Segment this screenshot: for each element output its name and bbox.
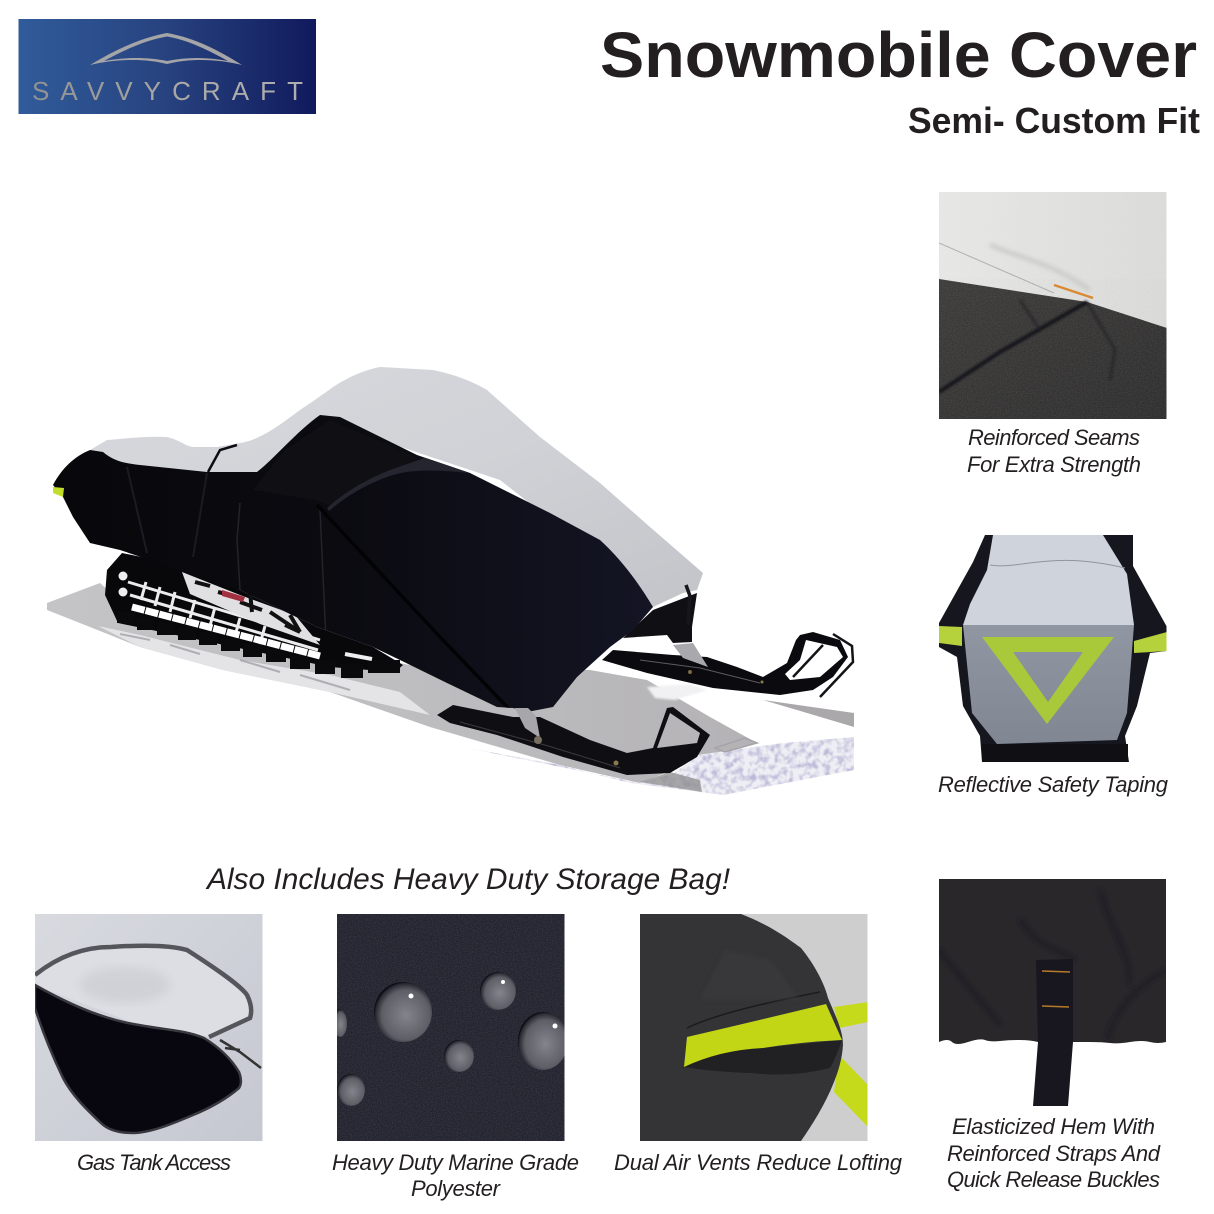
cover strap <box>208 445 237 472</box>
ground surface <box>47 583 854 795</box>
panel: marine grade polyester <box>332 914 579 1201</box>
water droplets <box>374 982 432 1042</box>
far ski <box>602 632 853 697</box>
caption: elasticized hem: Reinforced Straps And <box>947 1141 1161 1166</box>
suspension rails <box>128 582 320 650</box>
caption: reinforced seams: For Extra Strength <box>967 452 1141 477</box>
caption: reinforced seams: Reinforced Seams <box>968 425 1140 450</box>
track and suspension <box>105 553 403 678</box>
logo wordmark: SAVVYCRAFT <box>32 76 303 106</box>
storage bag heading: Also Includes Heavy Duty Storage Bag! <box>205 863 731 896</box>
caption: gas tank access: Gas Tank Access <box>77 1150 231 1175</box>
caption: elasticized hem: Quick Release Buckles <box>947 1167 1160 1192</box>
caption: elasticized hem: Elasticized Hem With <box>952 1114 1155 1139</box>
cover panel seams and folds <box>126 458 510 708</box>
logo: Savvycraft <box>18 19 316 114</box>
main photo: covered snowmobile <box>47 367 854 795</box>
front strap <box>686 585 690 625</box>
track teeth <box>117 612 400 678</box>
panel: reinforced seams <box>939 192 1167 477</box>
logo roof mark <box>90 33 242 65</box>
cover: gray top panel <box>90 367 703 607</box>
panel: reflective safety taping <box>938 535 1169 797</box>
panel: gas tank access <box>35 914 263 1175</box>
near ski <box>437 705 710 775</box>
strap stitches <box>1042 971 1070 1007</box>
title: Snowmobile Cover <box>600 19 1197 91</box>
panel: dual air vents <box>614 914 903 1175</box>
caption: dual air vents: Dual Air Vents Reduce Lofting <box>614 1150 903 1175</box>
front suspension <box>623 593 708 667</box>
caption: marine grade polyester: Polyester <box>411 1176 502 1201</box>
caption: marine grade polyester: Heavy Duty Marine Grade <box>332 1150 579 1175</box>
subtitle: Semi- Custom Fit <box>908 100 1200 141</box>
reflective tail tape <box>53 487 64 497</box>
cover: black lower panel <box>53 415 653 712</box>
caption: reflective taping: Reflective Safety Taping <box>938 772 1169 797</box>
hem strap <box>1033 959 1073 1106</box>
panel: elasticized hem <box>939 879 1167 1192</box>
